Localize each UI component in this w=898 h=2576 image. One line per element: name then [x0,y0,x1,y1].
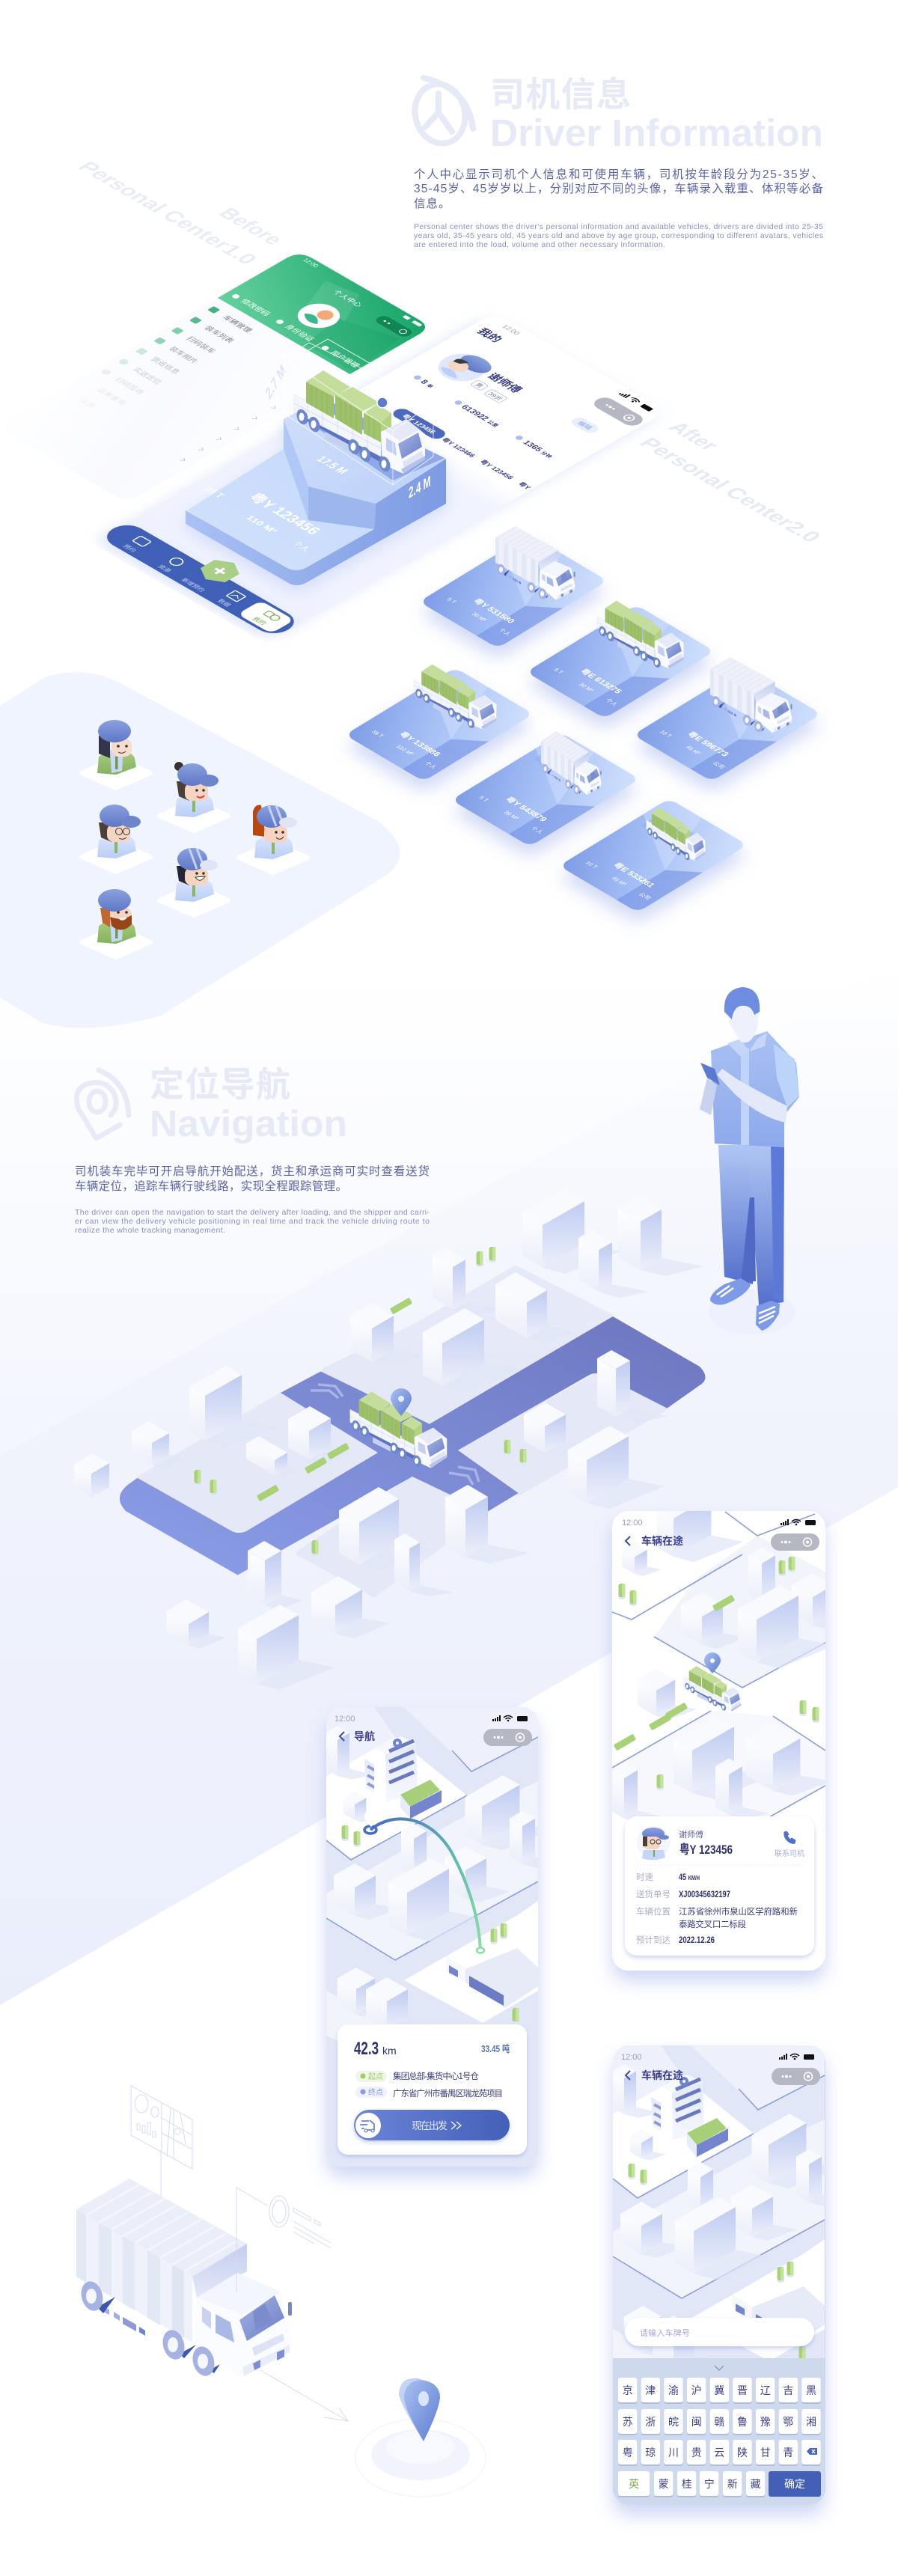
info rows [636,1873,671,1945]
navigation section background [0,959,898,2005]
large box truck [76,2179,292,2378]
arms and phone [717,1069,787,1123]
wireframe bounding box [284,343,433,485]
plate input field: 请输入车牌号 [640,2328,690,2338]
keyboard keys: 冀 [714,2384,724,2396]
green header: 个人中心 [331,289,364,308]
keyboard keys: 云 [714,2447,724,2459]
start row [355,2071,479,2082]
vehicle card: E 596773 box truck: 公司 [711,760,727,770]
truck pedestal with vehicle data [186,398,446,585]
plate tabs: 粤Y [516,480,534,490]
in-transit map [612,1511,825,1820]
route info card: 42.3 [354,2039,379,2059]
keyboard keys: 鄂 [783,2416,793,2428]
vehicle card: Y 133886 green truck: 110 M³ [395,744,415,757]
old phone dimension label: 2.7 M [263,361,287,403]
description: navigation: The driver can open the navigation to start the delivery after loading, and the shipper and carri- [75,1208,430,1217]
phone: plate input keyboard [612,2045,847,2509]
start row: 起点 [368,2072,383,2081]
keyboard keys: 桂 [682,2478,692,2490]
menu list: 扫码装车 [184,335,219,355]
map panel line drawing [131,2086,192,2225]
label: before personal center 1.0: Personal Center1.0 [73,158,263,268]
driver info card: 泰路交叉口二标段 [679,1919,747,1929]
keyboard keys: 京 [623,2384,633,2396]
avatar: driver 4 red hair [239,805,308,873]
label: after personal center 2.0: After [664,418,724,454]
keyboard keys: 闽 [691,2416,702,2428]
list chevrons [180,406,278,462]
keyboard keys: 晋 [737,2384,748,2396]
pedestal labels: 粤Y 123456 [245,490,325,537]
description: navigation: 车辆定位，追踪车辆行驶线路，实现全程跟踪管理。 [75,1179,347,1193]
keyboard keys: 皖 [668,2416,679,2428]
keyboard keys: 豫 [760,2416,771,2428]
description: driver information: are entered into the load, volume and other necessary information. [414,240,665,249]
vehicle card: Y 133886 green truck [345,665,534,781]
vehicle card: E 596773 box truck: 45 M³ [684,745,703,756]
status bar [335,1715,532,1746]
vehicle card: E 596773 box truck: 粤E 596773 [685,730,732,758]
vehicle card: Y 133886 green truck: 个人 [423,760,439,770]
vehicle card: Y 531580 box truck [419,526,608,648]
menu list: 扫码签收 [113,376,147,396]
menu list: 运单查询 [94,386,129,406]
tab: mine active: 我的 [251,616,268,626]
green header: 身份验证 [282,323,317,343]
driver profile: 谢师傅 [484,371,525,394]
road chevrons [311,1385,479,1485]
keyboard keys: 鲁 [737,2416,748,2428]
heading zh: 司机信息 [490,75,631,114]
menu list: 货运信息 [148,355,183,375]
truck on road [350,1392,447,1468]
menu list: 装车相片 [166,345,201,364]
end row: 广东省广州市番禺区瑞龙苑项目 [393,2088,503,2099]
map plateaus [141,1269,664,1594]
driver info card: 粤Y 123456 [679,1842,733,1857]
pedestal labels: 个人 [290,540,313,552]
avatar: driver 1 [82,720,150,788]
vehicle card: Y 543879 box truck: 5 T [477,795,490,803]
green header: 12:00 [302,257,320,269]
tab: resources [156,556,186,573]
vehicle card: Y 133886 green truck: 35 T [370,729,385,739]
location pin on truck [391,1388,412,1416]
phone: personal center 1.0 (old) [0,251,432,503]
route info card: 33.45 吨 [481,2043,510,2054]
tab: mine active [237,600,294,633]
shirt [711,1031,799,1147]
description: driver information: 信息。 [414,197,451,210]
green header [218,251,432,374]
driver info card: XJ00345632197 [679,1889,730,1899]
phone 2.0 status and title [471,319,660,428]
driver profile: 39岁 [486,391,504,401]
description: driver information: 个人中心显示司机个人信息和可使用车辆，司机按年龄段分为25-35岁、 [414,168,823,181]
status bar: 12:00 [622,1519,643,1527]
depart button [354,2110,510,2140]
tab: new booking: 新增预约 [180,577,207,593]
info rows: 预计到达 [636,1935,671,1945]
shoes [710,1278,751,1305]
keyboard keys: 辽 [760,2384,771,2396]
avatar section background panel [0,672,400,1028]
driver avatar [637,1826,670,1860]
avatar: driver 3 glasses [82,805,150,872]
vehicle card: E 596773 box truck [633,657,822,781]
driver info card: 江苏省徐州市泉山区学府路和新 [679,1906,798,1917]
keyboard keys: 赣 [714,2416,724,2428]
keyboard keys: 渝 [668,2384,679,2396]
phone 2.0 status and title: 我的 [474,326,505,344]
buildings [74,1189,703,1690]
pedestal labels: 35 T [201,485,227,500]
vehicle card: Y 543879 box truck: 粤Y 543879 [503,796,550,823]
info rows: 车辆位置 [636,1906,671,1917]
vehicle card: E 613275 green truck: 5 T [552,667,565,675]
vehicle card: Y 531580 box truck: 30 M³ [470,611,489,623]
description: driver information [414,168,823,249]
driver panel line drawing [236,2188,331,2292]
driver info card: 2022.12.26 [679,1935,715,1945]
driver info card: 谢师傅 [679,1829,703,1840]
description: navigation: er can view the delivery vehicle positioning in real time and track the vehicle driving route to [75,1217,430,1226]
tab: data [216,590,245,608]
driver info card: 联系司机 [775,1849,804,1858]
start row: 集团总部-集货中心1号仓 [393,2071,479,2081]
driver stats: 8 单 [418,379,436,389]
phone 2.0 status and title: 12:00 [501,323,522,336]
keyboard keys: 川 [668,2447,679,2459]
driver profile: 编辑 [575,420,594,431]
tab: data: 数据 [216,598,233,608]
section heading: driver information [409,75,823,154]
tab: appointment: 预约 [121,543,138,553]
keyboard keys: 英 [629,2478,639,2490]
green header: 用户管理 [328,349,362,369]
driver stats: 613922 公里 [459,403,501,428]
keyboard keys [618,2378,821,2497]
driver info card [625,1816,814,1956]
route arc [364,1810,484,1953]
phone: navigation [326,1707,561,2171]
heading en: Driver Information [490,112,823,154]
plate tabs [390,407,537,492]
keyboard background [613,2358,825,2508]
green header: 修改密码 [239,297,272,317]
keyboard keys: 琼 [645,2447,656,2459]
description: navigation: 司机装车完毕可开启导航开始配送，货主和承运商可实时查看送货 [75,1165,430,1178]
vehicle card: Y 133886 green truck: 粤Y 133886 [397,730,444,758]
vehicle card: E 533261 small green truck: 45 M³ [610,876,629,887]
keyboard keys: 确定 [784,2478,805,2490]
status bar: 导航 [354,1730,375,1742]
arrow: truck to destination [260,2370,348,2421]
description: driver information: 35-45岁、45岁岁以上，分别对应不同的头像，车辆录入载重、体积等必备 [414,181,823,195]
keyboard keys: 陕 [737,2447,748,2459]
driver profile: 男 [473,382,485,389]
end row [355,2087,503,2099]
phone: vehicle in transit [611,1487,858,1971]
pedestal labels [201,454,430,552]
bottom tab bar [99,510,319,638]
keyboard keys: 甘 [760,2447,771,2459]
plate badge pin [377,397,388,408]
keyboard keys: 藏 [751,2478,761,2490]
description: driver information: Personal center shows the driver's personal information and available vehicles, drivers are divided into 25-35 [414,222,823,231]
status bar: 车辆在途 [641,1535,683,1547]
bushes and hedges [194,1247,527,1556]
route info card [337,2024,527,2155]
label: before personal center 1.0: Before [214,204,288,248]
end row: 终点 [368,2087,383,2097]
description: driver information: years old, 35-45 years old, 45 years old and above by age group, corresponding to different avatars, vehicles [414,231,823,240]
menu list: 车辆管理 [220,314,254,334]
avatar: driver 5 striped cap [159,848,228,915]
isometric map [74,1189,705,1690]
tab: resources: 资源 [156,564,173,573]
vehicle card: E 613275 green truck: 粤E 613275 [578,667,625,695]
keyboard keys: 新 [727,2478,738,2490]
depart button: 现在出发 [412,2120,448,2131]
pedestal labels: 110 M³ [243,513,280,535]
info rows: 送货单号 [636,1889,671,1899]
status bar: 12:00 [335,1715,355,1724]
head [726,988,760,1043]
vehicle card: E 533261 small green truck: 粤E 533261 [611,861,658,889]
plate tabs: 粤Y 123466 [440,436,477,458]
vehicle card: E 533261 small green truck [559,799,748,912]
info rows: 时速 [636,1873,653,1882]
icon: location pin [76,1070,129,1138]
keyboard keys: 吉 [783,2384,793,2396]
tab: new booking [179,555,246,595]
menu list: 设置 [76,397,97,409]
vehicle card: Y 543879 box truck [451,731,640,846]
vehicle card: Y 531580 box truck: 5 T [445,596,458,605]
vehicle card: Y 531580 box truck: 个人 [497,627,513,637]
vehicle card: E 613275 green truck [526,601,715,718]
truck with green containers on pedestal [284,343,433,485]
vehicle card: Y 531580 box truck: 粤Y 531580 [471,597,518,625]
vehicle card: E 533261 small green truck: 10 T [584,860,599,870]
keyboard keys: 青 [783,2447,793,2459]
keyboard keys: 黑 [806,2384,816,2396]
status bar: 车辆在途 [641,2069,683,2081]
avatar: driver 2 [159,762,228,831]
plate tabs: 粤Y 123456 [400,413,438,435]
keyboard keys: 津 [645,2384,656,2396]
keyboard keys: 粤 [623,2447,633,2459]
menu list: 实送定位 [130,366,165,385]
description: navigation [75,1165,430,1235]
plate input field [625,2318,814,2346]
pedestal labels: 2.4 M [409,473,430,502]
keyboard keys: 宁 [704,2478,715,2490]
road network [120,1316,705,1575]
status bar [621,2053,820,2085]
driver info card: 45 KM/H [679,1872,700,1882]
keyboard keys: 苏 [623,2416,633,2428]
keyboard keys: 贵 [691,2447,702,2459]
route info card: km [382,2045,397,2057]
pedestal labels: 17.5 M [314,454,350,476]
section heading: navigation [76,1065,347,1144]
keyboard keys: 蒙 [659,2478,669,2490]
status bar [622,1519,819,1551]
vehicle card: Y 543879 box truck: 个人 [529,825,545,835]
driver profile [429,347,603,448]
phone call icon [784,1831,795,1843]
icon: steering wheel [409,78,473,149]
status bar: 12:00 [621,2053,642,2062]
driver stats [409,374,557,460]
avatar: driver 6 beard [82,889,150,957]
vehicle card: Y 543879 box truck: 30 M³ [502,810,521,821]
tab: appointment [121,536,151,553]
keyboard keys: 湘 [806,2416,816,2428]
driver stats: 1365 分钟 [521,439,555,460]
heading zh: 定位导航 [150,1065,290,1104]
description: navigation: realize the whole tracking management. [75,1226,225,1235]
heading en: Navigation [150,1104,347,1144]
trousers [718,1145,784,1305]
label: after personal center 2.0: Personal Center2.0 [635,434,826,546]
3D location pin on ripple [355,2378,486,2497]
vehicle card: E 596773 box truck: 10 T [658,729,674,739]
standing man with phone [700,987,799,1334]
vehicle card: E 613275 green truck: 30 M³ [577,682,596,693]
plate tabs: 粤Y 123456 [478,459,516,480]
menu list: 装车列表 [202,324,236,344]
vehicle card: E 613275 green truck: 个人 [604,698,620,707]
keyboard keys: 浙 [645,2416,656,2428]
menu list [62,305,254,417]
keyboard keys: 沪 [691,2384,702,2396]
vehicle card: E 533261 small green truck: 公司 [637,891,653,901]
phone: personal center 2.0 (new) [116,312,666,630]
